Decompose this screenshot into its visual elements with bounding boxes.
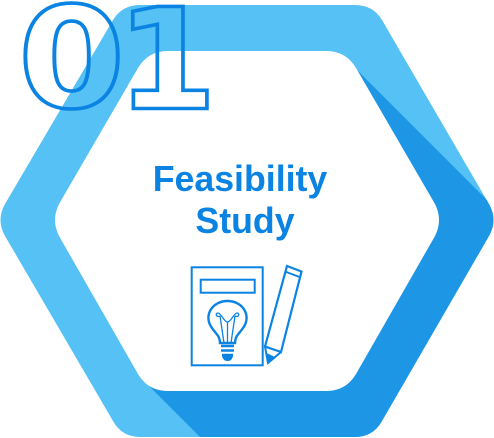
title: [153, 159, 327, 241]
title: Feasibility: [153, 159, 327, 199]
document title box: [201, 280, 255, 293]
icon: document with lightbulb and pencil: [192, 266, 302, 365]
dark shadow band: [150, 63, 494, 438]
number 01 outline: [18, 0, 217, 142]
pencil: [265, 266, 302, 364]
lightbulb: [208, 301, 247, 361]
document sheet: [192, 267, 263, 365]
inner white hexagon: [55, 51, 439, 391]
title: Study: [195, 201, 295, 241]
